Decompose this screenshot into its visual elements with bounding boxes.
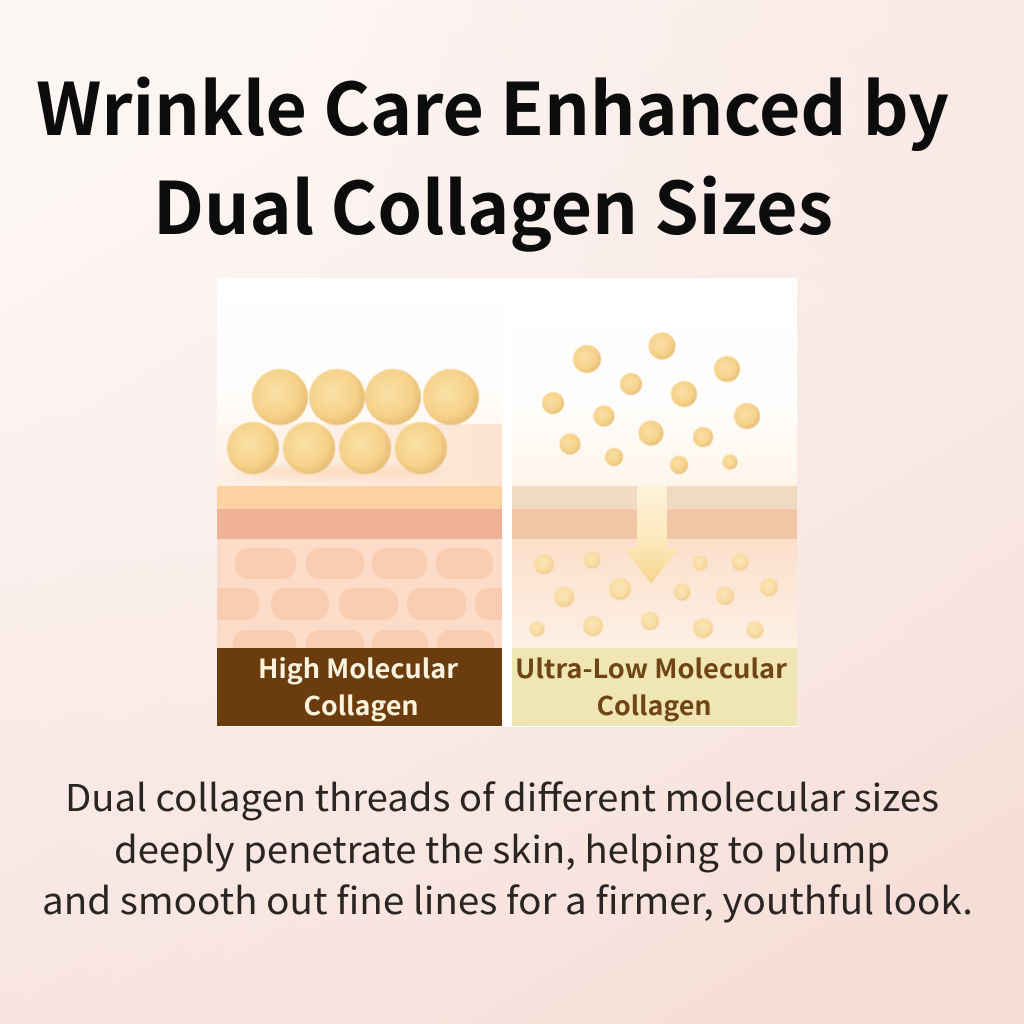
title: Wrinkle Care Enhanced by xyxy=(36,51,949,156)
arrow: penetration xyxy=(624,486,679,584)
skin layer: middle xyxy=(217,509,502,539)
skin layer: upper xyxy=(512,486,797,509)
label: high molecular xyxy=(217,648,502,726)
title: Dual Collagen Sizes xyxy=(153,150,833,255)
label: high molecular: High Molecular xyxy=(258,649,459,686)
description text: and smooth out fine lines for a firmer, youthful look. xyxy=(42,871,973,925)
label: ultra-low molecular: Collagen xyxy=(596,686,712,723)
skin layer: middle xyxy=(512,509,797,539)
label: high molecular: Collagen xyxy=(304,686,418,723)
description text: deeply penetrate the skin, helping to plump xyxy=(114,820,890,874)
skin layer: lower cells xyxy=(217,539,502,648)
panel backing xyxy=(217,278,797,727)
skin layer: upper xyxy=(217,486,502,509)
ultra-low spheres above skin xyxy=(542,332,760,474)
title xyxy=(36,51,949,255)
description text: Dual collagen threads of different molecular sizes xyxy=(65,768,939,822)
ultra-low spheres within skin xyxy=(530,552,778,638)
panel: high molecular collagen xyxy=(217,278,502,726)
skin layer: lower xyxy=(512,539,797,648)
high molecular spheres xyxy=(227,369,479,474)
label: ultra-low molecular: Ultra-Low Molecular xyxy=(515,649,788,686)
label: ultra-low molecular xyxy=(512,648,797,726)
panel: ultra-low molecular collagen xyxy=(512,278,797,726)
description text xyxy=(42,768,973,925)
